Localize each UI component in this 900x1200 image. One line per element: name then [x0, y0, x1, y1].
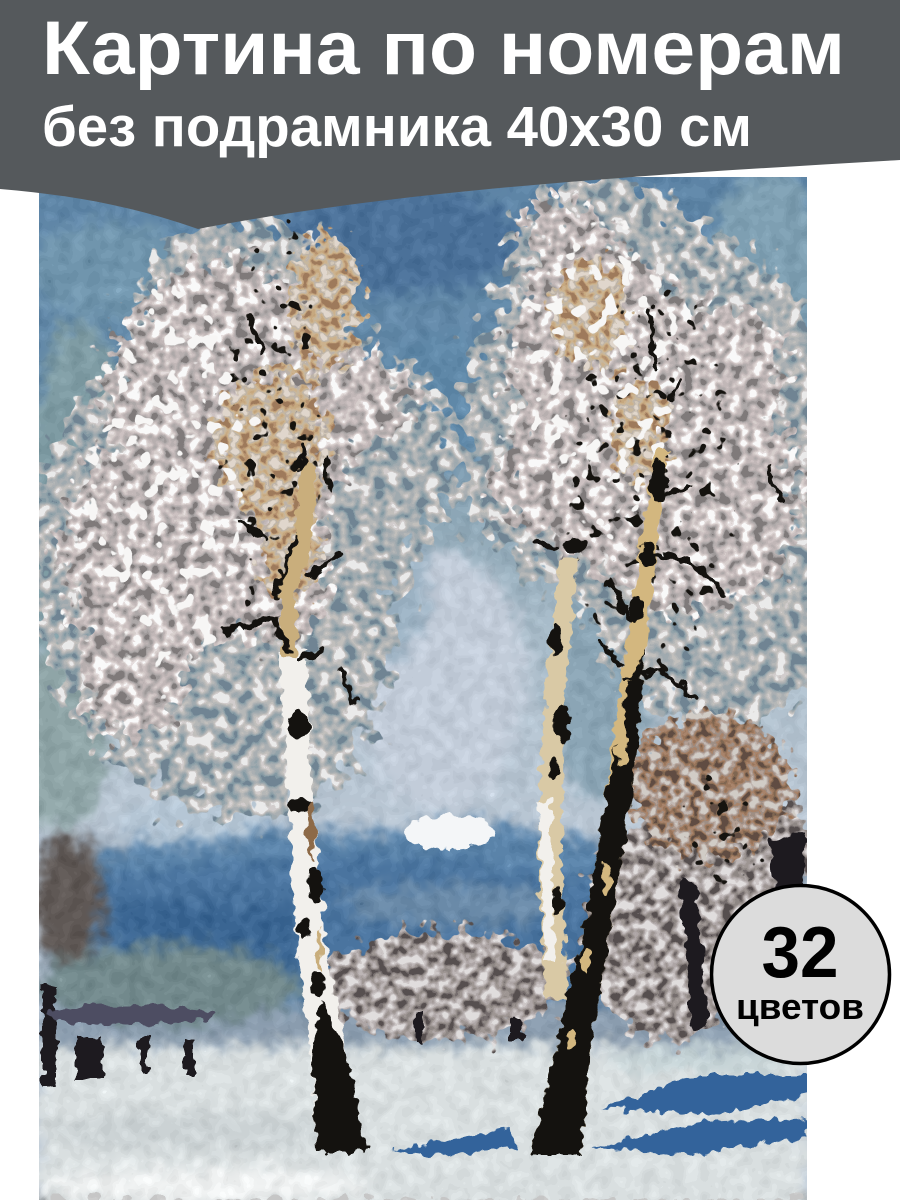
dark flecks in the trees	[214, 219, 764, 885]
inner foliage, left tree	[55, 255, 425, 745]
painting: winter birches	[39, 177, 807, 1200]
left birch trunk	[280, 650, 368, 1152]
tan leaves	[210, 225, 670, 610]
blue snow shadows	[390, 1075, 807, 1156]
distant treeline	[42, 830, 805, 1085]
title: Картина по номерам	[42, 6, 845, 91]
subtitle: без подрамника 40х30 см	[42, 95, 752, 159]
header banner	[0, 0, 900, 229]
brown autumn tree right	[625, 710, 795, 860]
snow cap on the far mountain	[404, 815, 496, 849]
inner foliage, right tree	[485, 190, 805, 615]
right birch thin trunk	[538, 538, 587, 1000]
right birch branches	[535, 310, 780, 698]
left birch upper branches	[225, 320, 355, 700]
badge: 32 colours	[712, 886, 890, 1064]
white flecks in the trees	[78, 220, 693, 672]
mid-distance grey bushes	[310, 795, 815, 1045]
outer foliage, left tree	[25, 210, 465, 820]
outer foliage, right tree	[460, 170, 840, 730]
right birch main trunk	[530, 450, 668, 1155]
sky and landscape base	[39, 177, 807, 1200]
badge: 32 colours: 32	[762, 913, 838, 993]
badge: 32 colours: цветов	[736, 986, 864, 1027]
